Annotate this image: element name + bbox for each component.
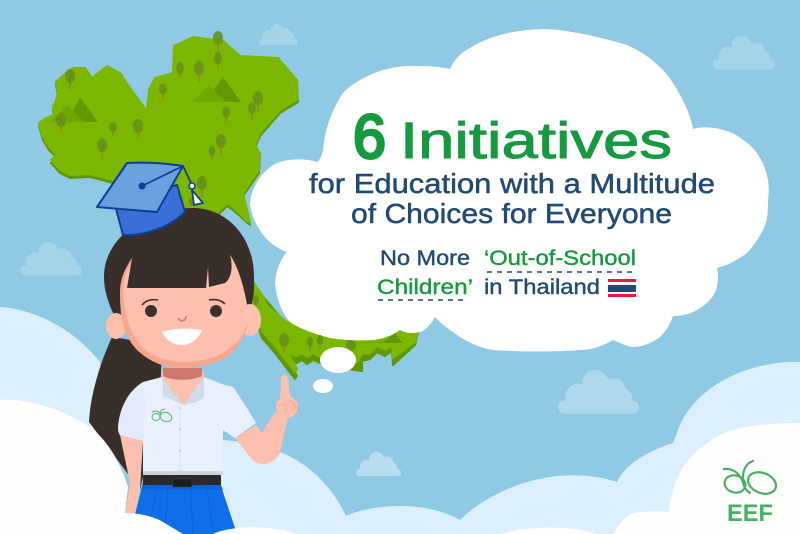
main thought cloud [250,29,769,352]
bangs [127,215,232,288]
map shadow [39,40,420,379]
trees [56,31,356,353]
ponytail [89,337,162,490]
tagline [377,247,636,300]
tagline: in Thailand [484,276,600,299]
icon: Thai flag [608,279,636,297]
smile [162,329,202,345]
mountains [50,77,403,343]
subheading [309,168,715,229]
small sky clouds [20,24,775,476]
thought dot large [320,347,356,373]
shirt [118,368,256,475]
nose [178,316,186,321]
subheading: for Education with a Multitude [309,168,715,199]
thought dot small [313,379,333,393]
map of Thailand [39,31,420,379]
shirt logo [152,409,173,423]
left arm [120,435,143,516]
hair [104,208,254,322]
ears [106,304,261,339]
belt [143,475,221,487]
tagline: No More [380,247,470,270]
eyes and brows [142,300,225,317]
right arm and pointing hand [235,375,298,464]
headline: 6 Initiatives: Initiatives [400,112,672,169]
tagline: Children’ [377,276,473,299]
pale back clouds [0,307,800,534]
headline: 6 Initiatives [353,103,672,172]
tagline: ‘Out-of-School [484,247,636,270]
logo wordmark: EEF [727,500,773,527]
subheading: of Choices for Everyone [351,198,672,229]
thought bubble [250,29,769,393]
headline: 6 Initiatives: 6 [353,103,386,172]
foreground white clouds [0,400,800,534]
skirt [130,483,237,534]
logo mark [723,461,779,498]
graduation cap [97,163,203,235]
logo: EEF [723,461,779,527]
character: student [89,163,298,534]
face [120,255,249,368]
map land [39,37,420,372]
